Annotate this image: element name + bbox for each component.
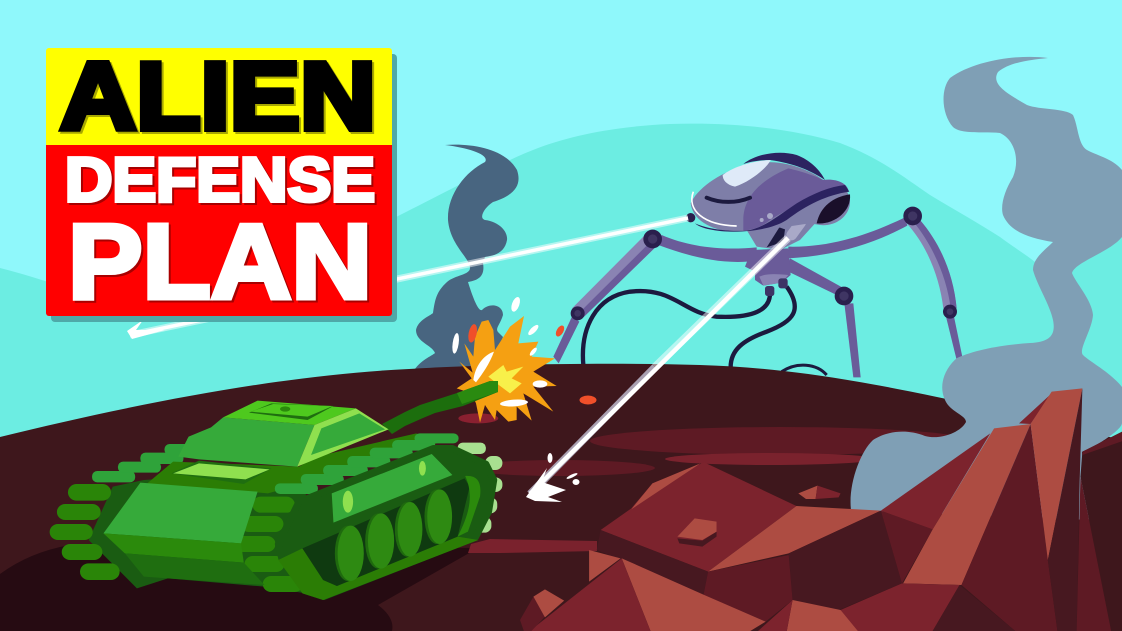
title panel shadow <box>51 54 397 322</box>
front hatch <box>171 461 271 484</box>
ground shadow <box>0 545 478 631</box>
ground <box>0 364 1122 631</box>
heading ALIEN: ALIEN <box>60 43 376 150</box>
muzzle explosion <box>451 296 566 423</box>
rocks <box>520 388 1122 631</box>
neck <box>747 207 817 250</box>
flame burst <box>457 316 557 423</box>
laser beam to ground <box>530 238 788 494</box>
joint centres <box>574 211 953 317</box>
ground stripes <box>465 427 970 553</box>
limbs <box>553 217 963 377</box>
wheels <box>335 489 449 581</box>
dark track pads <box>50 484 303 592</box>
red band <box>46 145 392 316</box>
side plate <box>332 454 452 523</box>
turret <box>178 417 314 467</box>
sparks <box>473 352 494 382</box>
small smoke plume <box>413 145 519 372</box>
title panel <box>46 43 392 321</box>
laser impact splash <box>526 453 580 502</box>
heading DEFENSE: DEFENSE <box>65 146 375 215</box>
hip feet <box>765 286 774 296</box>
big smoke plume <box>851 57 1122 520</box>
laser beam to left <box>127 218 688 339</box>
alien tripod legs <box>553 207 963 377</box>
side hull <box>278 448 494 597</box>
joints <box>571 207 957 320</box>
rear pale track pads <box>458 443 502 533</box>
right light track pads <box>275 433 459 494</box>
tank <box>50 401 502 600</box>
head <box>686 153 850 232</box>
alien tripod head and body <box>686 153 850 296</box>
cables <box>583 287 827 375</box>
wheel bay <box>302 478 470 586</box>
heading PLAN: PLAN <box>68 203 372 321</box>
left dark track <box>89 473 306 593</box>
orange spark on ground <box>580 396 596 404</box>
yellow band <box>46 48 392 145</box>
deck <box>147 433 437 493</box>
body <box>745 248 791 286</box>
left light track pads <box>92 436 227 482</box>
tank barrel <box>382 381 498 434</box>
impact crater <box>458 413 498 423</box>
front plates <box>103 483 258 543</box>
